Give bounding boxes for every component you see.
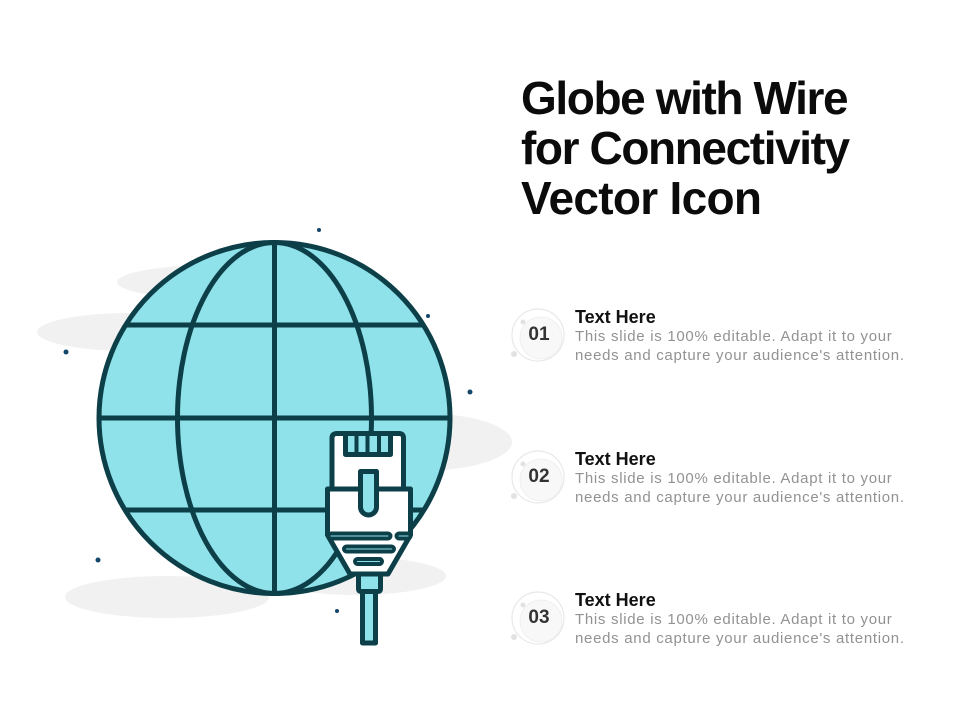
- body text 02: needs and capture your audience's attention.: [575, 489, 905, 506]
- number 02: 02: [528, 466, 550, 487]
- decorative dots: [64, 228, 472, 613]
- list item 03: [511, 590, 905, 647]
- slots: [328, 534, 410, 564]
- body text 02: This slide is 100% editable. Adapt it to your: [575, 470, 892, 487]
- body text 02: [575, 470, 905, 506]
- number 03: 03: [528, 607, 550, 628]
- cable collar: [358, 574, 380, 592]
- badge ring 03: [511, 592, 564, 644]
- body text 01: [575, 328, 905, 364]
- latch: [360, 472, 376, 515]
- title: [521, 72, 850, 224]
- plug head: [332, 434, 404, 490]
- number 01: 01: [528, 324, 550, 345]
- illustration: globe with network plug: [37, 228, 512, 646]
- globe: [99, 242, 450, 594]
- contacts: [346, 434, 390, 454]
- plug body: [328, 489, 410, 574]
- heading 03: Text Here: [575, 590, 656, 610]
- body text 01: needs and capture your audience's attention.: [575, 347, 905, 364]
- background shadow ellipses: [37, 265, 512, 618]
- heading 02: Text Here: [575, 449, 656, 469]
- cable: [362, 590, 376, 643]
- body text 01: This slide is 100% editable. Adapt it to your: [575, 328, 892, 345]
- list item 01: [511, 307, 905, 364]
- plug connector: [328, 434, 410, 643]
- list item 02: [511, 449, 905, 506]
- body text 03: This slide is 100% editable. Adapt it to your: [575, 611, 892, 628]
- contact dividers: [356, 434, 379, 455]
- title: Vector Icon: [521, 172, 761, 224]
- badge ring 01: [511, 308, 564, 362]
- title: for Connectivity: [521, 122, 849, 174]
- body text 03: [575, 611, 905, 647]
- badge ring 02: [511, 450, 564, 504]
- title: Globe with Wire: [521, 72, 847, 124]
- body text 03: needs and capture your audience's attention.: [575, 630, 905, 647]
- heading 01: Text Here: [575, 307, 656, 327]
